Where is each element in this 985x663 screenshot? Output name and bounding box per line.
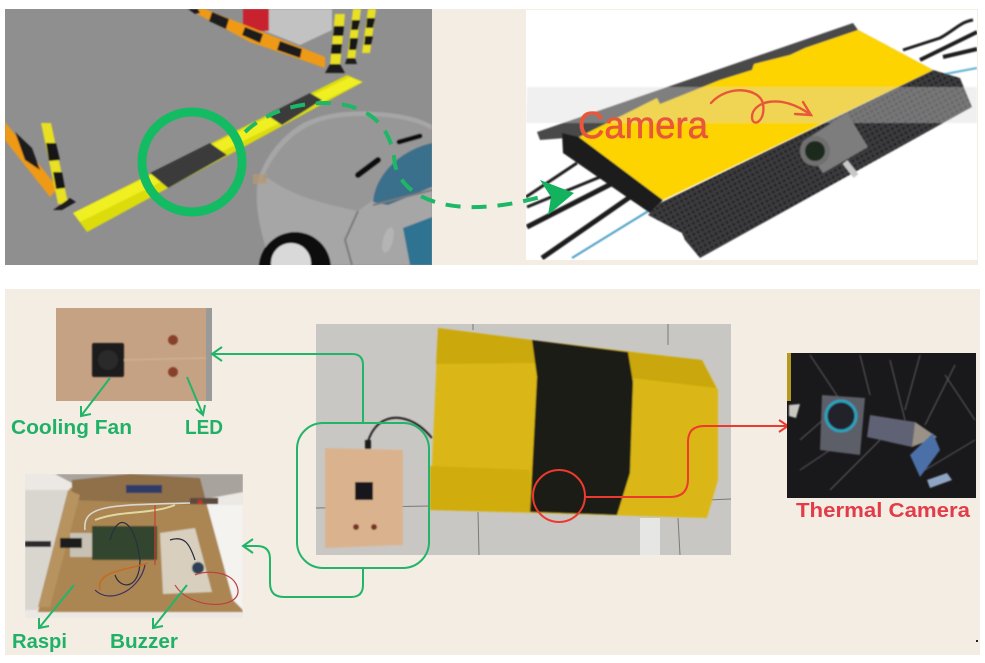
photo: thermal camera bbox=[787, 353, 976, 498]
illustration: cable ramp with camera bbox=[526, 10, 977, 260]
small stray dot bbox=[976, 640, 978, 642]
connector: controller box outline and green lines bbox=[212, 347, 429, 597]
label: Camera: Camera bbox=[578, 105, 709, 147]
panel: bottom background bbox=[5, 289, 980, 655]
photo: prototype speed bump with controller box bbox=[316, 324, 731, 555]
panel: top background bbox=[5, 9, 978, 265]
photo: inside of controller box bbox=[25, 474, 243, 618]
arrow: to cooling fan bbox=[81, 378, 110, 416]
label: Buzzer: Buzzer bbox=[110, 631, 178, 653]
illustration: parking lot speed bump with car bbox=[5, 9, 432, 265]
arrow: to buzzer bbox=[153, 585, 187, 628]
label: Thermal Camera: Thermal Camera bbox=[796, 500, 971, 522]
icon: camera label curly arrow bbox=[711, 90, 811, 123]
arrow: to LED bbox=[187, 377, 205, 415]
label: Cooling Fan: Cooling Fan bbox=[11, 417, 132, 439]
arrow: dashed callout from bump to ramp bbox=[245, 103, 574, 215]
photo: cooling fan and LED panel bbox=[56, 308, 212, 401]
label: Raspi: Raspi bbox=[12, 631, 67, 653]
connector: red circle and line to thermal camera bbox=[533, 420, 788, 522]
label: LED: LED bbox=[185, 417, 223, 439]
highlight circle on speed bump bbox=[142, 112, 242, 212]
arrow: to raspi bbox=[39, 585, 74, 628]
